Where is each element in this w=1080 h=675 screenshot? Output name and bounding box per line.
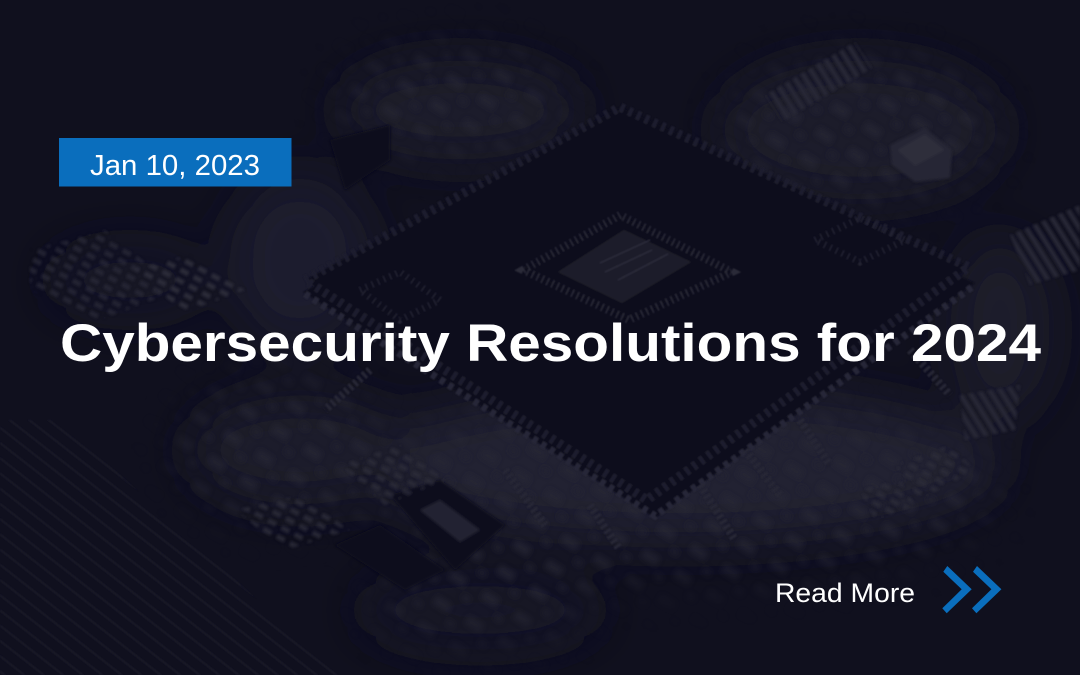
- read more link: Read More: [775, 578, 915, 608]
- icon: double chevron arrow: [942, 566, 1001, 613]
- board traces lower left: [0, 420, 340, 675]
- chip surface dots: [360, 218, 905, 320]
- chip package side and rim: [303, 107, 975, 518]
- mottled board components: [213, 61, 942, 622]
- lower solder legs: [325, 350, 950, 550]
- date badge: [59, 138, 292, 186]
- component clusters: [30, 42, 1080, 590]
- read more link: [775, 566, 1001, 613]
- date badge: Jan 10, 2023: [90, 150, 260, 182]
- central processor die: [523, 215, 732, 320]
- title: Cybersecurity Resolutions for 2024: [60, 314, 1042, 373]
